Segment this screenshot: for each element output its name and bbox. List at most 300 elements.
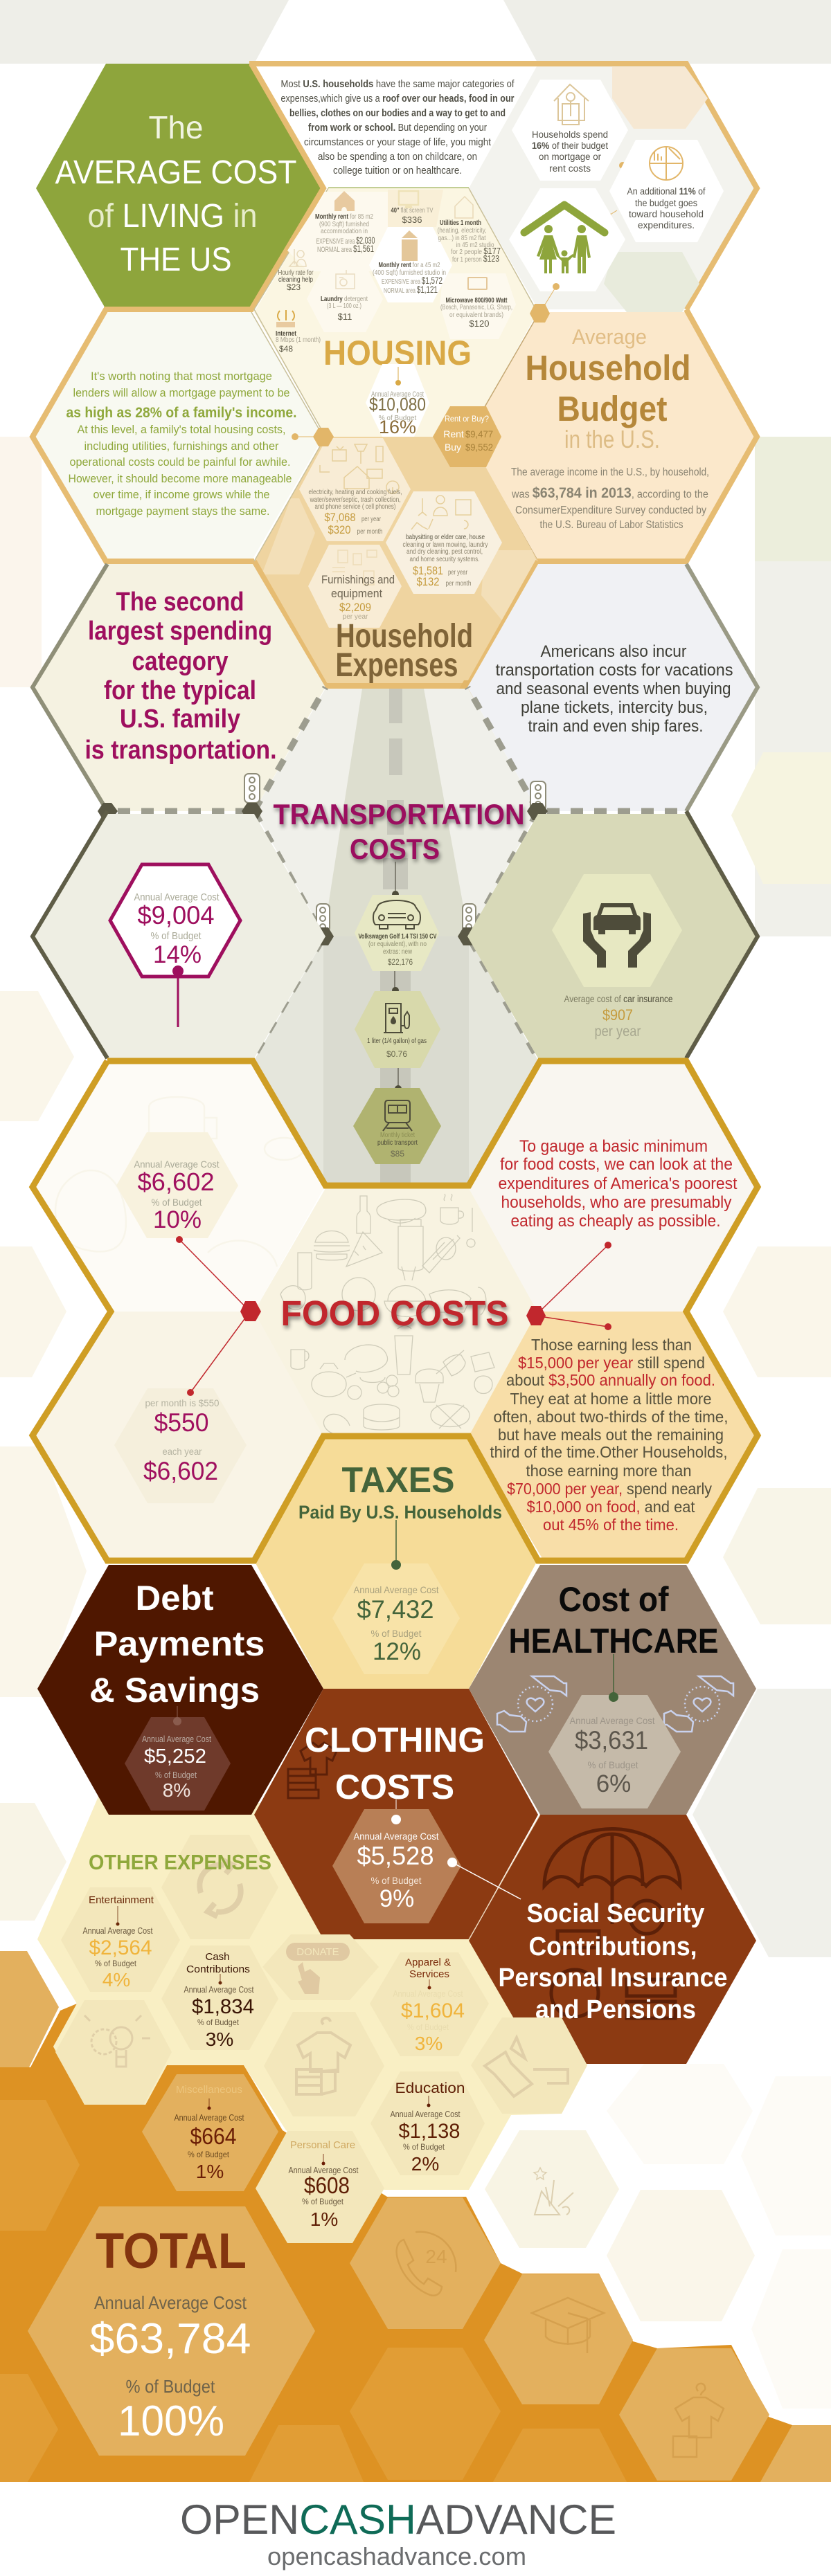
item: cash contributions: $1,834 bbox=[192, 1995, 254, 2018]
food annual stat: Annual Average Cost bbox=[134, 1159, 220, 1170]
magenta stat hexagon bbox=[110, 864, 240, 1027]
panel: other expenses background bbox=[37, 1779, 587, 2190]
card: household operations: and home security systems. bbox=[410, 556, 479, 563]
item: public transport bbox=[353, 1088, 441, 1164]
panel: social security: Social Security bbox=[526, 1899, 705, 1928]
panel: food right upper: To gauge a basic minimum bbox=[519, 1137, 708, 1156]
panel: total: $63,784 bbox=[90, 2315, 251, 2363]
card: furnishings: equipment bbox=[331, 587, 382, 600]
panel: social security: Contributions, bbox=[529, 1932, 697, 1961]
callout: household 11 percent: An additional 11% of bbox=[627, 186, 706, 197]
panel: car insurance: Average cost of car insurance bbox=[564, 993, 673, 1004]
debt stat bbox=[125, 1706, 231, 1811]
dashed road lines bbox=[118, 687, 682, 1056]
item: entertainment: $2,564 bbox=[89, 1936, 152, 1959]
food annual stat: $6,602 bbox=[137, 1168, 215, 1196]
callout: mortgage 16 percent bbox=[512, 80, 628, 181]
icon hexagon: donate bbox=[262, 1934, 379, 2000]
item: utilities: for 2 people $177 bbox=[451, 246, 501, 256]
item: education: % of Budget bbox=[403, 2142, 445, 2152]
item: personal care: Annual Average Cost bbox=[288, 2166, 359, 2175]
item: cash contributions: Annual Average Cost bbox=[184, 1985, 254, 1995]
panel: food left lower bbox=[33, 1312, 325, 1561]
heading: average household budget bbox=[525, 325, 691, 453]
panel: housing bbox=[254, 188, 537, 437]
text: income note: ConsumerExpenditure Survey conducted by bbox=[515, 505, 706, 516]
heading: household expenses: Household bbox=[336, 618, 473, 655]
icon: car in hands bbox=[583, 903, 651, 968]
item: apparel and services: Services bbox=[409, 1968, 449, 1980]
item: cash contributions: Contributions bbox=[186, 1963, 250, 1975]
panel: americans also incur bbox=[467, 564, 758, 811]
food monthly stat: each year bbox=[162, 1446, 202, 1457]
item: cash contributions bbox=[161, 1945, 278, 2050]
footer brand bbox=[180, 2496, 616, 2570]
hexagon: phone 24: 24 bbox=[425, 2246, 447, 2267]
card: utilities: $320 bbox=[328, 523, 350, 536]
panel: introduction bbox=[104, 64, 757, 314]
hexagon: graduation cap bbox=[484, 2274, 633, 2404]
item: utilities: (heating, electricity, bbox=[438, 227, 486, 235]
healthcare stat: $3,631 bbox=[575, 1726, 648, 1754]
food doodles bbox=[280, 1194, 494, 1434]
item: internet: 8 Mbps (1 month) bbox=[276, 336, 321, 344]
item: monthly rent 45 m2: NORMAL area $1,121 bbox=[384, 284, 438, 295]
debt stat: 8% bbox=[163, 1779, 190, 1801]
item: miscellaneous: % of Budget bbox=[188, 2150, 230, 2159]
panel: food right lower: out 45% of the time. bbox=[543, 1516, 679, 1534]
panel: total bbox=[28, 2206, 315, 2456]
card: furnishings bbox=[308, 545, 402, 628]
panel: americans also incur: Americans also incur bbox=[540, 642, 687, 661]
panel: social security: Personal Insurance bbox=[499, 1963, 727, 1993]
item: internet: $48 bbox=[279, 344, 293, 354]
item: monthly rent 45 m2: Monthly rent for a 45 m2 bbox=[378, 262, 440, 269]
panel: title hexagon: THE US bbox=[120, 242, 231, 278]
card: furnishings: $2,209 bbox=[339, 601, 371, 614]
title: housing: HOUSING bbox=[323, 334, 472, 372]
intro paragraph bbox=[281, 79, 515, 176]
card: utilities: and phone service ( cell phones) bbox=[314, 503, 396, 511]
item: microwave: Microwave 800/900 Watt bbox=[446, 297, 508, 305]
panel: americans also incur: train and even ship fares. bbox=[528, 717, 704, 736]
magenta stat hexagon: Annual Average Cost bbox=[134, 891, 220, 903]
food monthly stat: $550 bbox=[154, 1408, 209, 1437]
item: miscellaneous: Miscellaneous bbox=[176, 2084, 242, 2096]
heading: average household budget: in the U.S. bbox=[564, 425, 660, 453]
clothing stat bbox=[332, 1809, 461, 1923]
item: utilities: in 45 m2 studio bbox=[456, 242, 494, 249]
text: income note bbox=[511, 466, 709, 531]
panel: title hexagon: of LIVING in bbox=[87, 198, 258, 235]
item: laundry detergent: $11 bbox=[338, 311, 352, 322]
panel: food right lower: $15,000 per year still spend bbox=[518, 1354, 705, 1372]
clothing stat: Annual Average Cost bbox=[353, 1831, 439, 1842]
panel: food right lower: often, about two-thirds of the time, bbox=[493, 1408, 729, 1426]
panel: cost of healthcare: HEALTHCARE bbox=[508, 1622, 719, 1660]
icon hexagon: folded shirt bbox=[264, 2012, 384, 2116]
item: public transport: $85 bbox=[391, 1149, 404, 1159]
item: monthly rent 45 m2: EXPENSIVE area $1,572 bbox=[382, 275, 443, 286]
magenta stat hexagon: 14% bbox=[153, 941, 202, 968]
icon: folded shirts bbox=[288, 1743, 337, 1798]
panel: taxes bbox=[254, 1436, 537, 1689]
food monthly stat: $6,602 bbox=[143, 1457, 218, 1485]
panel: mortgage note: At this level, a family's total housing costs, bbox=[78, 423, 285, 436]
icon: caring hands left bbox=[497, 1676, 566, 1732]
panel: social security: and Pensions bbox=[535, 1995, 696, 2024]
card: utilities: electricity, heating and cooking fuels, bbox=[309, 489, 402, 496]
item: microwave: $120 bbox=[470, 318, 489, 329]
item: apparel and services: Annual Average Cost bbox=[393, 1989, 463, 1999]
item: personal care: $608 bbox=[304, 2173, 350, 2198]
taxes stat: $7,432 bbox=[357, 1595, 434, 1624]
panel: total: Annual Average Cost bbox=[94, 2292, 247, 2313]
callout: household 11 percent bbox=[605, 140, 724, 242]
food annual stat: 10% bbox=[153, 1206, 202, 1233]
card: furnishings: per year bbox=[343, 613, 368, 621]
food annual stat: % of Budget bbox=[151, 1197, 202, 1208]
panel: mortgage note: as high as 28% of a family's income. bbox=[66, 405, 296, 421]
callout: mortgage 16 percent: Households spend bbox=[532, 129, 608, 140]
rent stat: 16% bbox=[379, 417, 416, 437]
item: entertainment: Annual Average Cost bbox=[83, 1926, 153, 1936]
item: education bbox=[370, 2071, 485, 2175]
panel: car insurance bbox=[467, 811, 758, 1058]
panel: social security bbox=[469, 1815, 756, 2064]
panel: total: % of Budget bbox=[126, 2376, 215, 2397]
panel: food right lower: about $3,500 annually on food. bbox=[506, 1371, 715, 1389]
intro paragraph: Most U.S. households have the same major categories of bbox=[281, 79, 515, 90]
item: internet: Internet bbox=[276, 330, 297, 338]
panel: mortgage note: It's worth noting that most mortgage bbox=[91, 370, 272, 383]
panel: second largest spending: The second bbox=[116, 588, 244, 617]
card: utilities bbox=[299, 438, 411, 541]
healthcare stat: Annual Average Cost bbox=[569, 1715, 655, 1726]
connector node hexagons bbox=[313, 304, 550, 699]
item: utilities bbox=[438, 197, 501, 264]
text: income note: the U.S. Bureau of Labor Statistics bbox=[540, 519, 683, 531]
panel: clothing costs: COSTS bbox=[335, 1768, 454, 1806]
icon hexagon: donate: DONATE bbox=[296, 1946, 339, 1958]
panel: mortgage note: operational costs could be painful for awhile. bbox=[69, 455, 291, 469]
taxes stat: 12% bbox=[373, 1638, 421, 1665]
item: cleaning help: cleaning help bbox=[278, 276, 313, 284]
card: utilities: $7,068 bbox=[324, 511, 356, 524]
panel: party icon hexagon bbox=[485, 2130, 619, 2248]
panel: americans also incur: plane tickets, intercity bus, bbox=[521, 698, 708, 717]
footer brand: OPENCASHADVANCE bbox=[180, 2496, 616, 2543]
heading: taxes bbox=[298, 1460, 502, 1523]
rent stat bbox=[366, 364, 429, 437]
panel: second largest spending: category bbox=[132, 647, 229, 676]
heading: average household budget: Household bbox=[525, 348, 691, 388]
item: flat screen TV: 40" flat screen TV bbox=[391, 207, 434, 215]
card: household operations: per month bbox=[446, 580, 471, 588]
item: personal care: Personal Care bbox=[290, 2139, 355, 2151]
hexagon: rent or buy: Buy bbox=[445, 442, 461, 453]
item: monthly rent 45 m2: (400 Sqft) furnished studio in bbox=[373, 269, 446, 277]
item: internet bbox=[276, 310, 321, 354]
card: household operations: per year bbox=[448, 569, 468, 577]
clothing stat: % of Budget bbox=[371, 1875, 422, 1886]
heading: taxes: TAXES bbox=[342, 1460, 454, 1500]
item: entertainment bbox=[61, 1887, 180, 1992]
panel: food right lower: $70,000 per year, spend nearly bbox=[507, 1480, 712, 1498]
item: education: $1,138 bbox=[399, 2120, 460, 2143]
food monthly stat bbox=[114, 1388, 247, 1503]
item: flat screen TV: $336 bbox=[402, 215, 422, 225]
card: furnishings: Furnishings and bbox=[321, 573, 395, 586]
panel: mortgage note: mortgage payment stays the same. bbox=[96, 505, 270, 518]
item: miscellaneous: 1% bbox=[196, 2161, 224, 2182]
item: flat screen TV bbox=[391, 191, 434, 225]
magenta stat hexagon: % of Budget bbox=[151, 930, 202, 942]
item: car: (or equivalent), with no bbox=[368, 941, 427, 948]
card: utilities: per year bbox=[361, 516, 382, 523]
callout: household 11 percent: toward household bbox=[629, 209, 704, 219]
item: microwave bbox=[440, 278, 512, 329]
panel: food right lower: but have meals out the remaining bbox=[498, 1426, 724, 1444]
panel: food right lower: those earning more than bbox=[526, 1462, 691, 1480]
item: cleaning help: Hourly rate for bbox=[278, 269, 314, 277]
heading: taxes: Paid By U.S. Households bbox=[298, 1502, 502, 1523]
hexagon: rent or buy bbox=[433, 406, 501, 467]
food monthly stat: per month is $550 bbox=[145, 1397, 220, 1408]
healthcare stat: 6% bbox=[596, 1770, 631, 1797]
intro paragraph: circumstances or your stage of life, you might bbox=[304, 137, 491, 148]
item: personal care bbox=[256, 2131, 384, 2243]
clothing stat: 9% bbox=[379, 1885, 414, 1912]
clothing stat: $5,528 bbox=[357, 1842, 434, 1870]
connector: clothing to social security bbox=[447, 1858, 521, 1899]
panel: transportation annual cost bbox=[33, 811, 325, 1058]
item: miscellaneous: $664 bbox=[190, 2123, 237, 2149]
panel: second largest spending: for the typical bbox=[104, 676, 256, 705]
item: miscellaneous bbox=[142, 2074, 278, 2191]
item: education: Education bbox=[395, 2080, 465, 2096]
item: cleaning help: $23 bbox=[287, 282, 301, 292]
item: laundry detergent: (3 L — 100 oz.) bbox=[327, 302, 361, 310]
card: household operations: babysitting or elder care, house bbox=[406, 534, 485, 541]
heading: average household budget: Average bbox=[572, 325, 647, 349]
panel: total: TOTAL bbox=[96, 2224, 247, 2279]
icon: caring hands right bbox=[664, 1676, 733, 1732]
panel: clothing costs: CLOTHING bbox=[305, 1721, 485, 1759]
item: laundry detergent: Laundry detergent bbox=[321, 296, 368, 303]
item: monthly rent 85 m2 bbox=[315, 191, 375, 254]
panel: debt payments and savings: Debt bbox=[136, 1579, 214, 1617]
item: microwave: (Bosch, Panasonic, LG, Sharp, bbox=[440, 304, 512, 311]
icon: family under roof bbox=[509, 188, 625, 314]
panel: second largest spending: largest spending bbox=[88, 617, 272, 646]
panel: car insurance: $907 bbox=[602, 1006, 633, 1024]
item: gas: 1 liter (1/4 gallon) of gas bbox=[367, 1037, 427, 1045]
panel: debt payments and savings: Payments bbox=[94, 1624, 265, 1663]
item: miscellaneous: Annual Average Cost bbox=[175, 2113, 244, 2123]
panel: title hexagon: The bbox=[148, 109, 204, 145]
item: entertainment: 4% bbox=[102, 1969, 130, 1990]
panel: cost of healthcare bbox=[469, 1565, 756, 1815]
hexagon: rent or buy: $9,477 bbox=[465, 428, 493, 439]
item: gas bbox=[355, 991, 440, 1068]
item: car: Volkswagen Golf 1.4 TSI 150 CV bbox=[359, 933, 437, 941]
panel: mortgage note: including utilities, furnishings and other bbox=[84, 439, 279, 453]
item: apparel and services: 3% bbox=[415, 2033, 443, 2054]
heading: household expenses: Expenses bbox=[335, 647, 458, 684]
item: car bbox=[355, 895, 439, 971]
text: income note: The average income in the U.S., by household, bbox=[511, 466, 709, 478]
taxes stat: % of Budget bbox=[371, 1628, 422, 1639]
rent stat: Annual Average Cost bbox=[371, 390, 424, 399]
item: monthly rent 85 m2: NORMAL area $1,561 bbox=[317, 243, 374, 254]
card: household operations: $1,581 bbox=[413, 564, 443, 577]
debt stat: $5,252 bbox=[144, 1745, 206, 1768]
panel: car insurance: per year bbox=[594, 1024, 641, 1040]
panel: debt payments and savings bbox=[37, 1565, 323, 1815]
heading: household expenses bbox=[335, 618, 473, 684]
panel: title hexagon bbox=[36, 64, 323, 309]
rent stat: % of Budget bbox=[379, 415, 416, 422]
item: personal care: % of Budget bbox=[302, 2197, 344, 2206]
item: utilities: gas...) in 85 m2 flat bbox=[438, 235, 486, 242]
item: public transport: public transport bbox=[377, 1139, 418, 1147]
panel: food right lower: third of the time.Other Households, bbox=[490, 1443, 727, 1461]
panel: household budget bbox=[467, 309, 757, 561]
hexagon: rent or buy: $9,552 bbox=[465, 442, 493, 453]
panel: food center bbox=[254, 1188, 537, 1436]
panel: mortgage note bbox=[33, 309, 325, 561]
item: cash contributions: % of Budget bbox=[197, 2017, 240, 2027]
item: utilities: for 1 person $123 bbox=[452, 253, 499, 264]
panel: debt payments and savings: & Savings bbox=[89, 1671, 260, 1709]
item: apparel and services: Apparel & bbox=[405, 1957, 451, 1968]
debt stat: % of Budget bbox=[155, 1770, 197, 1780]
intro paragraph: also be spending a ton on childcare, on bbox=[318, 152, 477, 163]
panel: food right upper: expenditures of America's poorest bbox=[499, 1174, 738, 1193]
panel: mortgage note: lenders will allow a mortgage payment to be bbox=[73, 386, 289, 399]
panel: clothing costs bbox=[254, 1689, 538, 1939]
panel: second largest spending bbox=[33, 564, 325, 811]
panel: food right lower: $10,000 on food, and eat bbox=[526, 1498, 695, 1516]
panel: food right lower: They eat at home a little more bbox=[510, 1390, 712, 1408]
heading: transportation costs bbox=[273, 798, 525, 865]
item: cleaning help bbox=[278, 249, 314, 292]
item: monthly rent 85 m2: accommodation in bbox=[321, 228, 368, 235]
card: household operations: and dry cleaning, pest control, bbox=[406, 548, 483, 556]
panel: orange total background bbox=[0, 2004, 831, 2482]
food annual stat bbox=[116, 1132, 238, 1238]
magenta stat hexagon: $9,004 bbox=[137, 901, 215, 929]
healthcare stat bbox=[548, 1692, 681, 1808]
footer brand: opencashadvance.com bbox=[267, 2542, 526, 2570]
intro paragraph: expenses,which give us a roof over our heads, food in our bbox=[281, 93, 515, 105]
connectors: food costs bbox=[176, 1236, 611, 1396]
callout: mortgage 16 percent: 16% of their budget bbox=[532, 140, 608, 151]
item: cash contributions: 3% bbox=[206, 2029, 233, 2050]
icon hexagon: recycle arrows bbox=[161, 1835, 278, 1939]
icon hexagon: paint roller bbox=[471, 2017, 587, 2114]
callout: household 11 percent: the budget goes bbox=[635, 198, 697, 208]
panel: food left upper bbox=[33, 1061, 325, 1312]
item: laundry detergent bbox=[321, 270, 368, 322]
intro paragraph: from work or school. But depending on your bbox=[308, 123, 487, 134]
card: utilities: per month bbox=[357, 528, 382, 536]
icon: umbrella and money bbox=[544, 1829, 680, 2018]
panel: second largest spending: is transportation. bbox=[84, 736, 277, 765]
panel: cost of healthcare: Cost of bbox=[558, 1580, 669, 1619]
item: utilities: Utilities 1 month bbox=[440, 219, 481, 227]
panel: mortgage note: However, it should become more manageable bbox=[68, 472, 292, 485]
intro paragraph: college tuition or on healthcare. bbox=[333, 165, 462, 176]
callout: household 11 percent: expenditures. bbox=[638, 220, 695, 230]
item: monthly rent 85 m2: (900 Sqft) furnished bbox=[319, 221, 369, 228]
taxes stat bbox=[332, 1560, 460, 1674]
card: utilities: water/sewer/septic, trash collection, bbox=[310, 496, 400, 504]
hexagon: clothing hanger bbox=[619, 2348, 769, 2480]
item: microwave: or equivalent brands) bbox=[449, 311, 503, 319]
heading: average household budget: Budget bbox=[557, 389, 668, 428]
card: household operations bbox=[386, 491, 502, 594]
hexagon: rent or buy: Rent bbox=[443, 428, 464, 439]
item: education: Annual Average Cost bbox=[391, 2110, 461, 2119]
heading: transportation costs: TRANSPORTATION bbox=[273, 798, 525, 831]
intro paragraph: bellies, clothes on our bodies and a way to get to and bbox=[289, 108, 506, 119]
panel: food right lower: Those earning less than bbox=[531, 1336, 692, 1354]
item: apparel and services: $1,604 bbox=[401, 1999, 465, 2022]
panel: food right upper: eating as cheaply as possible. bbox=[511, 1212, 720, 1231]
taxes stat: Annual Average Cost bbox=[353, 1584, 439, 1595]
gold food frame bbox=[33, 1061, 758, 1561]
healthcare stat: % of Budget bbox=[587, 1759, 638, 1770]
hexagon: phone 24 bbox=[350, 2197, 501, 2329]
icon hexagon: gear and bulb bbox=[55, 2000, 172, 2105]
panel: household expenses bbox=[254, 437, 538, 686]
panel: title hexagon: AVERAGE COST bbox=[55, 154, 296, 191]
item: apparel and services: % of Budget bbox=[407, 2022, 449, 2032]
callout: mortgage 16 percent: on mortgage or bbox=[539, 152, 601, 162]
item: monthly rent 85 m2: EXPENSIVE area $2,030 bbox=[316, 235, 375, 246]
node hexagons and traffic lights bbox=[98, 774, 548, 945]
panel: second largest spending: U.S. family bbox=[120, 705, 240, 734]
debt stat: Annual Average Cost bbox=[142, 1734, 211, 1744]
text: income note: was $63,784 in 2013, according to the bbox=[511, 485, 708, 501]
item: monthly rent 85 m2: Monthly rent for 85 m2 bbox=[315, 213, 373, 221]
card: household operations: cleaning or lawn mowing, laundry bbox=[403, 541, 488, 549]
panel: americans also incur: transportation costs for vacations bbox=[496, 661, 733, 680]
item: car: $22,176 bbox=[388, 957, 413, 967]
heading: transportation costs: COSTS bbox=[350, 833, 440, 865]
rent stat: $10,080 bbox=[369, 394, 426, 415]
card: household operations: $132 bbox=[417, 575, 439, 588]
item: apparel and services bbox=[370, 1952, 489, 2056]
item: entertainment: Entertainment bbox=[89, 1894, 154, 1906]
item: education: 2% bbox=[411, 2153, 439, 2175]
item: public transport: Monthly ticket bbox=[380, 1132, 415, 1139]
item: monthly rent 45 m2 bbox=[373, 230, 446, 295]
panel: food right upper: for food costs, we can look at the bbox=[500, 1155, 733, 1174]
item: entertainment: % of Budget bbox=[95, 1959, 137, 1968]
callout: mortgage 16 percent: rent costs bbox=[549, 163, 591, 174]
heading: other expenses: OTHER EXPENSES bbox=[89, 1850, 271, 1874]
panel: transportation road bbox=[98, 687, 682, 1185]
item: personal care: 1% bbox=[310, 2208, 338, 2230]
panel: mortgage note: over time, if income grows while the bbox=[93, 488, 270, 501]
item: cash contributions: Cash bbox=[205, 1951, 230, 1963]
panel: food right upper bbox=[467, 1061, 758, 1312]
item: gas: $0.76 bbox=[386, 1049, 407, 1059]
panel: total: 100% bbox=[118, 2397, 224, 2445]
